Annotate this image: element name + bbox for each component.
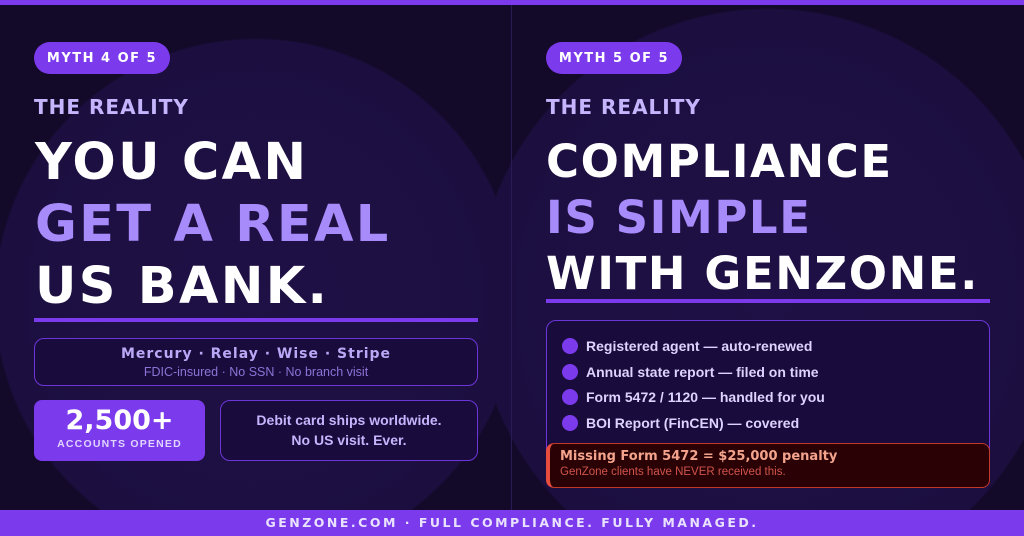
headline: COMPLIANCE xyxy=(546,135,893,188)
panel: myth 5 xyxy=(546,42,990,488)
item list: BOI Report (FinCEN) — covered xyxy=(586,414,799,430)
headline: WITH GENZONE. xyxy=(546,247,979,300)
headline xyxy=(546,135,979,300)
underline bar xyxy=(546,299,990,303)
label: the reality: THE REALITY xyxy=(34,95,189,119)
stat: 2,500+ accounts: ACCOUNTS OPENED xyxy=(57,438,182,450)
footer bar: GENZONE.COM · FULL COMPLIANCE. FULLY MANAGED. xyxy=(265,515,759,530)
pill: myth 5 of 5: MYTH 5 OF 5 xyxy=(559,50,669,66)
box: bank partners xyxy=(34,338,478,386)
footer bar xyxy=(0,510,1024,536)
headline: GET A REAL xyxy=(35,195,391,254)
item list: Form 5472 / 1120 — handled for you xyxy=(586,389,825,405)
headline: YOU CAN xyxy=(35,133,308,192)
label: the reality: THE REALITY xyxy=(546,95,701,119)
panel: myth 4 xyxy=(34,42,478,461)
headline: US BANK. xyxy=(35,257,329,316)
pill: myth 4 of 5 xyxy=(34,42,170,74)
pill: myth 5 of 5 xyxy=(546,42,682,74)
headline: IS SIMPLE xyxy=(546,191,812,244)
stat: 2,500+ accounts: 2,500+ xyxy=(65,405,174,436)
box: bank partners: FDIC-insured · No SSN · No branch visit xyxy=(144,365,368,379)
item list: Registered agent — auto-renewed xyxy=(586,338,812,354)
box: debit card: Debit card ships worldwide. xyxy=(256,412,442,428)
stat: 2,500+ accounts xyxy=(34,400,205,461)
callout: penalty warning: GenZone clients have NEVER received this. xyxy=(560,466,786,478)
box: bank partners: Mercury · Relay · Wise · Stripe xyxy=(121,346,391,362)
box: debit card: No US visit. Ever. xyxy=(291,432,407,448)
top bar xyxy=(0,0,1024,5)
center divider xyxy=(511,5,512,510)
item list: Annual state report — filed on time xyxy=(586,364,819,380)
pill: myth 4 of 5: MYTH 4 OF 5 xyxy=(47,50,157,66)
callout: penalty warning: Missing Form 5472 = $25,000 penalty xyxy=(560,449,837,464)
checklist box xyxy=(546,320,990,488)
underline bar xyxy=(34,318,478,322)
item list xyxy=(562,338,825,431)
headline xyxy=(34,133,391,316)
box: debit card xyxy=(220,400,478,461)
callout: penalty warning xyxy=(546,443,990,488)
